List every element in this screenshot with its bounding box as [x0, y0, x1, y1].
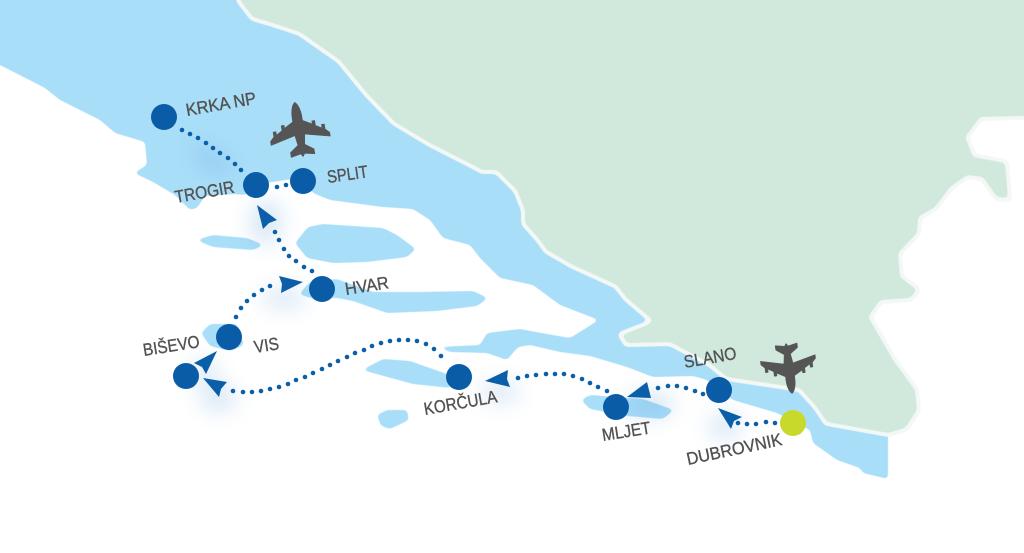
marker: Mljet	[603, 394, 629, 420]
marker: Korčula	[446, 364, 472, 390]
label: Split: SPLIT	[326, 161, 369, 187]
label: Dubrovnik: DUBROVNIK	[685, 429, 784, 469]
island: Korčula	[362, 359, 451, 388]
icon: plane near Split	[265, 98, 333, 161]
icon: plane near Dubrovnik	[759, 340, 820, 397]
arrow: to Mljet	[627, 382, 651, 398]
island: Vis	[201, 324, 244, 351]
arrow: to Vis	[194, 351, 217, 374]
arrow: to Korčula	[485, 370, 510, 387]
marker: Trogir	[243, 172, 269, 198]
island: Brač	[295, 224, 416, 263]
label: Slano: SLANO	[682, 343, 738, 372]
label: Vis: VIS	[252, 333, 280, 357]
label: Mljet: MLJET	[600, 417, 652, 445]
destination markers	[151, 104, 806, 436]
label: Korčula: KORČULA	[422, 385, 499, 419]
marker: Vis	[216, 324, 242, 350]
arrow: to Biševo	[203, 378, 227, 397]
islands	[196, 224, 674, 429]
island: Hvar	[299, 279, 488, 313]
island: Mljet	[581, 395, 674, 419]
arrow: to Trogir	[257, 205, 277, 229]
label: Trogir: TROGIR	[173, 177, 236, 207]
route arrowheads	[194, 205, 742, 429]
island: Šolta	[196, 235, 264, 250]
arrow: to Slano	[718, 408, 742, 429]
marker: Biševo	[173, 363, 199, 389]
label: Hvar: HVAR	[343, 272, 390, 299]
island: Lastovo	[377, 410, 409, 429]
arrow: to Hvar	[279, 276, 303, 293]
label: Biševo: BIŠEVO	[141, 330, 201, 360]
marker: Hvar	[309, 276, 335, 302]
sea	[0, 0, 888, 479]
dotted route	[180, 128, 777, 426]
soft route shadows	[187, 139, 741, 438]
mainland	[240, 0, 1024, 433]
marker: Split	[290, 168, 316, 194]
marker: Dubrovnik start	[780, 410, 806, 436]
marker: Krka NP	[151, 104, 177, 130]
marker: Slano	[706, 377, 732, 403]
label: Krka NP: KRKA NP	[184, 88, 258, 120]
